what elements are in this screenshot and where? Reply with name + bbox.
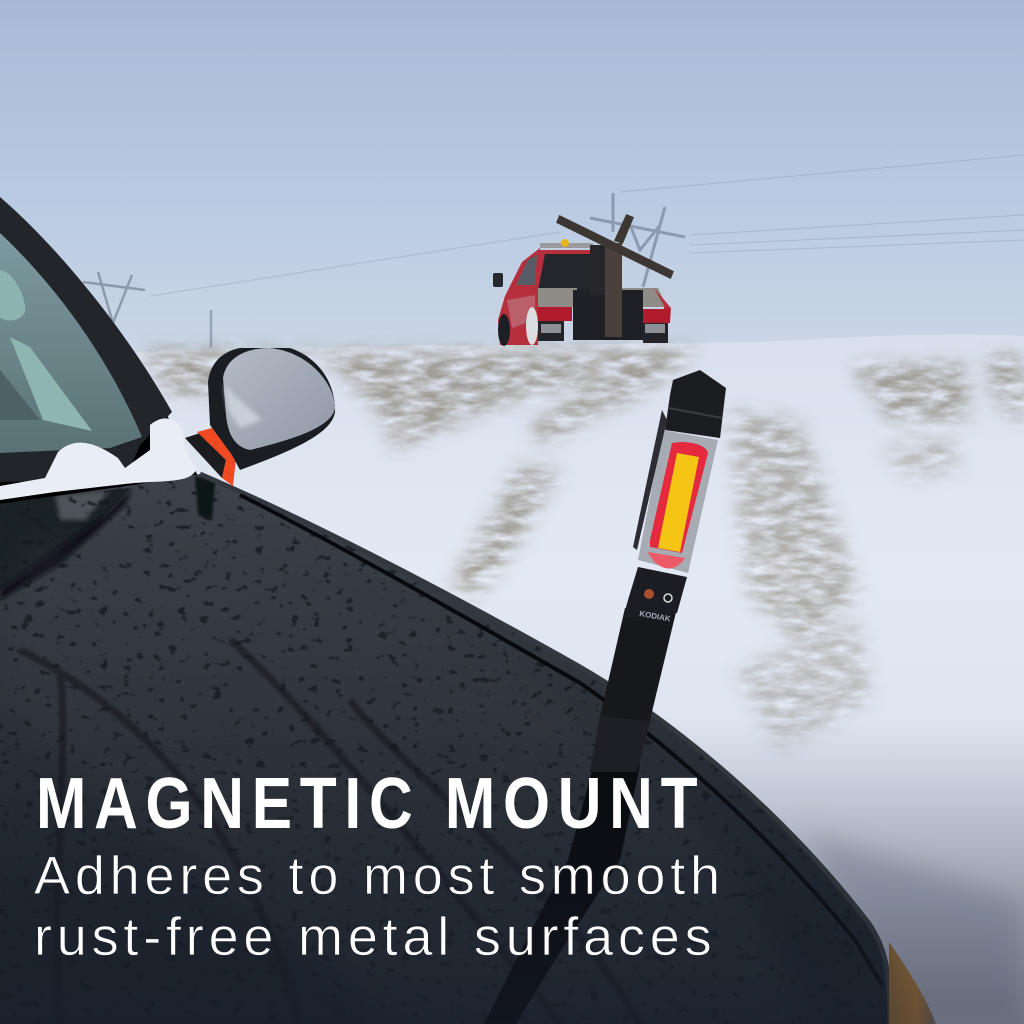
title: MAGNETIC MOUNT	[36, 764, 705, 844]
flashlight reflection	[484, 760, 640, 1024]
hood rim and seam	[200, 474, 890, 1024]
snow on cowl	[0, 418, 196, 500]
subtitle: Adheres to most smooth	[34, 846, 725, 906]
bottom shade	[0, 720, 1024, 1024]
flashlight brand: KODIAK	[639, 609, 672, 623]
snowy field	[135, 334, 1024, 1024]
side mirror	[185, 348, 335, 486]
tow truck	[493, 216, 672, 346]
windshield and pillar	[0, 197, 172, 482]
power lines and pylons	[83, 155, 1024, 347]
subtitle	[34, 846, 725, 967]
dry grass and ruts	[140, 348, 1024, 750]
far pylon behind truck	[590, 193, 685, 287]
car hood	[0, 474, 890, 1024]
sky	[0, 0, 1024, 360]
subtitle: rust-free metal surfaces	[34, 907, 716, 967]
hood reflections	[0, 475, 836, 936]
snow shadow at lower right	[800, 830, 1024, 1024]
amber headlight	[889, 942, 936, 1024]
flashlight	[590, 370, 726, 772]
